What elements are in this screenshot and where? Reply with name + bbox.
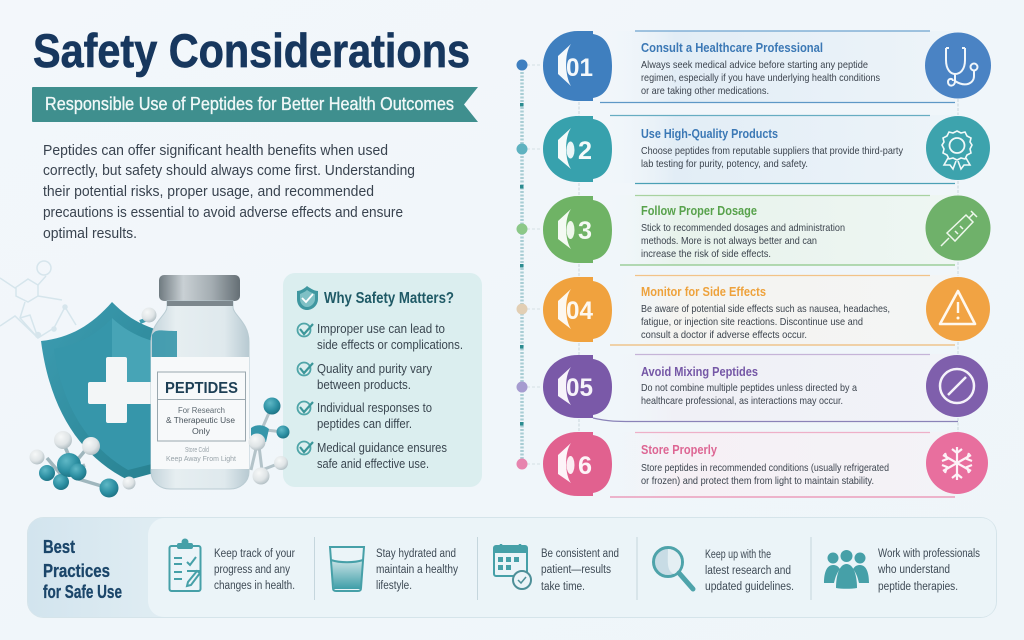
- dividers: [314, 537, 811, 600]
- practice: track progress: changes in health.: [214, 580, 295, 592]
- intro paragraph: their potential risks, proper usage, and recommended: [43, 183, 374, 200]
- step 3 text: increase the risk of side effects.: [641, 248, 771, 260]
- step 2 text: Choose peptides from reputable suppliers that provide third-party: [641, 145, 904, 157]
- card 2: [605, 115, 955, 184]
- panel: why safety matters: [283, 273, 482, 487]
- panel: best practices: [28, 518, 996, 618]
- item: individual responses: peptides can differ.: [317, 416, 412, 431]
- practice: stay hydrated: [330, 547, 458, 592]
- card 5: [593, 354, 958, 422]
- intro paragraph: Peptides can offer significant health benefits when used: [43, 142, 388, 159]
- step 3 text: [641, 203, 845, 260]
- step 1 text: Consult a Healthcare Professional: [641, 40, 823, 55]
- item: quality and purity: [298, 361, 432, 392]
- step 5 text: Do not combine multiple peptides unless directed by a: [641, 382, 857, 394]
- molecule top ball behind vial: [140, 308, 156, 322]
- step 2 text: lab testing for purity, potency, and safety.: [641, 158, 808, 170]
- card 6: [605, 432, 955, 497]
- vial label: Keep Away From Light: [166, 456, 236, 463]
- item: improper use: Improper use can lead to: [317, 321, 445, 336]
- vial cap: [159, 275, 240, 301]
- practice: work with professionals: who understand: [877, 564, 950, 576]
- item: quality and purity: between products.: [317, 377, 411, 392]
- vial label: & Therapeutic Use: [166, 416, 236, 425]
- subtitle ribbon: Responsible Use of Peptides for Better Health Outcomes: [45, 94, 454, 114]
- item: individual responses: Individual responses to: [317, 400, 432, 415]
- background molecule decoration: [0, 261, 76, 338]
- practice: stay hydrated: lifestyle.: [376, 580, 412, 592]
- step 3 text: Stick to recommended dosages and administration: [641, 222, 845, 234]
- item: individual responses: [298, 400, 432, 431]
- subtitle ribbon: [32, 87, 478, 122]
- step 4 text: Monitor for Side Effects: [641, 284, 766, 299]
- number badge 06: 6: [578, 452, 592, 480]
- step 1 text: or are taking other medications.: [641, 85, 769, 97]
- practice: track progress: [170, 538, 295, 592]
- step 2 text: Use High-Quality Products: [641, 126, 778, 141]
- item: medical guidance: safe anid effective use.: [317, 456, 429, 471]
- step 5: avoid mixing peptides: [543, 354, 988, 422]
- step 4 text: fatigue, or injection site reactions. Discontinue use and: [641, 316, 863, 328]
- step 2 text: [641, 126, 904, 170]
- practice: stay hydrated: maintain a healthy: [376, 564, 458, 576]
- item: improper use: [298, 321, 463, 352]
- step 5 text: healthcare professional, as interactions may occur.: [641, 395, 843, 407]
- card 3: [605, 195, 955, 265]
- intro paragraph: optimal results.: [43, 225, 137, 242]
- molecule right: [248, 398, 290, 484]
- practice: stay hydrated: Stay hydrated and: [376, 548, 456, 560]
- icon: syringe: [926, 196, 990, 260]
- number badge 02: [543, 116, 612, 182]
- icon: clipboard: [170, 538, 200, 591]
- intro paragraph: precautions is essential to avoid adverse effects and ensure: [43, 204, 403, 221]
- number badge 01: 01: [566, 54, 593, 82]
- icon: prohibition sign: [926, 355, 988, 417]
- title: Safety Considerations: [33, 24, 470, 77]
- number badge 03: [543, 196, 612, 263]
- step 1 text: [641, 40, 880, 97]
- number badge 02: 2: [578, 137, 592, 165]
- step 4 text: [641, 284, 890, 341]
- step 3 text: methods. More is not always better and can: [641, 235, 817, 247]
- practice: be consistent: Be consistent and: [541, 548, 619, 560]
- step 6 text: [641, 442, 889, 487]
- number badge 05: 05: [566, 374, 593, 402]
- step 6 text: Store peptides in recommended conditions (usually refrigerated: [641, 462, 889, 474]
- card 1: [600, 31, 955, 102]
- practice: keep up with research: [654, 548, 794, 593]
- vial label: Only: [192, 427, 210, 436]
- practice: work with professionals: peptide therapies.: [878, 581, 958, 593]
- heading: best practices for safe use: for Safe Use: [43, 582, 122, 602]
- heading: best practices for safe use: Best: [43, 537, 75, 557]
- number badge 06: [543, 432, 612, 496]
- step 2: use high-quality products: [543, 115, 990, 184]
- timeline rail: [516, 60, 541, 470]
- number badge 04: [543, 277, 612, 342]
- step 1 text: Always seek medical advice before starting any peptide: [641, 59, 868, 71]
- number badge 01: [543, 31, 612, 101]
- practice: keep up with research: Keep up with the: [705, 549, 771, 561]
- shield with medical cross: [41, 302, 165, 480]
- practice: work with professionals: [824, 548, 980, 593]
- step 6: store properly: [543, 432, 988, 497]
- step 3: follow proper dosage: [543, 195, 990, 265]
- number badge 05: [543, 355, 612, 418]
- item: quality and purity: Quality and purity vary: [317, 361, 432, 376]
- vial label: PEPTIDES: [165, 380, 238, 397]
- number badge 04: 04: [566, 297, 593, 325]
- icon: warning triangle: [926, 277, 990, 341]
- practice: be consistent: take time.: [541, 581, 585, 593]
- item: medical guidance: Medical guidance ensures: [317, 440, 447, 455]
- step 5 text: [641, 364, 857, 407]
- icon: group of people: [824, 550, 869, 589]
- step 3 text: Follow Proper Dosage: [641, 203, 757, 218]
- item: medical guidance: [298, 440, 447, 471]
- icon: safety shield: [297, 286, 318, 310]
- step 1 text: regimen, especially if you have underlying health conditions: [641, 72, 880, 84]
- icon: snowflake: [926, 432, 988, 494]
- practice: be consistent: patient—results: [541, 564, 611, 576]
- step 6 text: or frozen) and protect them from light to maintain stability.: [641, 475, 874, 487]
- step 4 text: consult a doctor if adverse effects occur.: [641, 329, 807, 341]
- intro paragraph: correctly, but safety should always come first. Understanding: [43, 162, 415, 179]
- heading: best practices for safe use: Practices: [43, 561, 110, 581]
- practice: track progress: Keep track of your: [214, 548, 295, 560]
- peptide vial: [151, 275, 249, 489]
- icon: water glass: [330, 547, 364, 591]
- vial label: [151, 357, 249, 469]
- step 6 text: Store Properly: [641, 442, 718, 457]
- vial label: For Research: [178, 406, 225, 415]
- practice: work with professionals: Work with professionals: [878, 548, 980, 560]
- icon: stethoscope: [925, 32, 991, 98]
- item: improper use: side effects or complications.: [317, 337, 463, 352]
- icon: magnifying glass: [654, 548, 693, 589]
- card 4: [605, 275, 955, 345]
- practice: keep up with research: updated guidelines.: [705, 581, 794, 593]
- practice: track progress: progress and any: [214, 564, 290, 576]
- molecule left: [30, 431, 136, 498]
- vial neck and glass body: [151, 301, 249, 489]
- heading: why safety matters: Why Safety Matters?: [324, 290, 454, 307]
- step 4: monitor for side effects: [543, 275, 990, 345]
- step 5 text: Avoid Mixing Peptides: [641, 364, 758, 379]
- vial label: Store Cold: [185, 447, 209, 454]
- intro paragraph: [43, 142, 415, 242]
- row connectors: [579, 99, 958, 432]
- step 1: consult a healthcare professional: [543, 31, 991, 102]
- practice: be consistent: [494, 544, 619, 593]
- practice: keep up with research: latest research and: [705, 565, 791, 577]
- icon: award rosette: [926, 116, 990, 180]
- heading: best practices for safe use: [43, 537, 122, 602]
- icon: calendar with clock: [494, 544, 531, 589]
- number badge 03: 3: [578, 217, 592, 245]
- step 4 text: Be aware of potential side effects such as nausea, headaches,: [641, 303, 890, 315]
